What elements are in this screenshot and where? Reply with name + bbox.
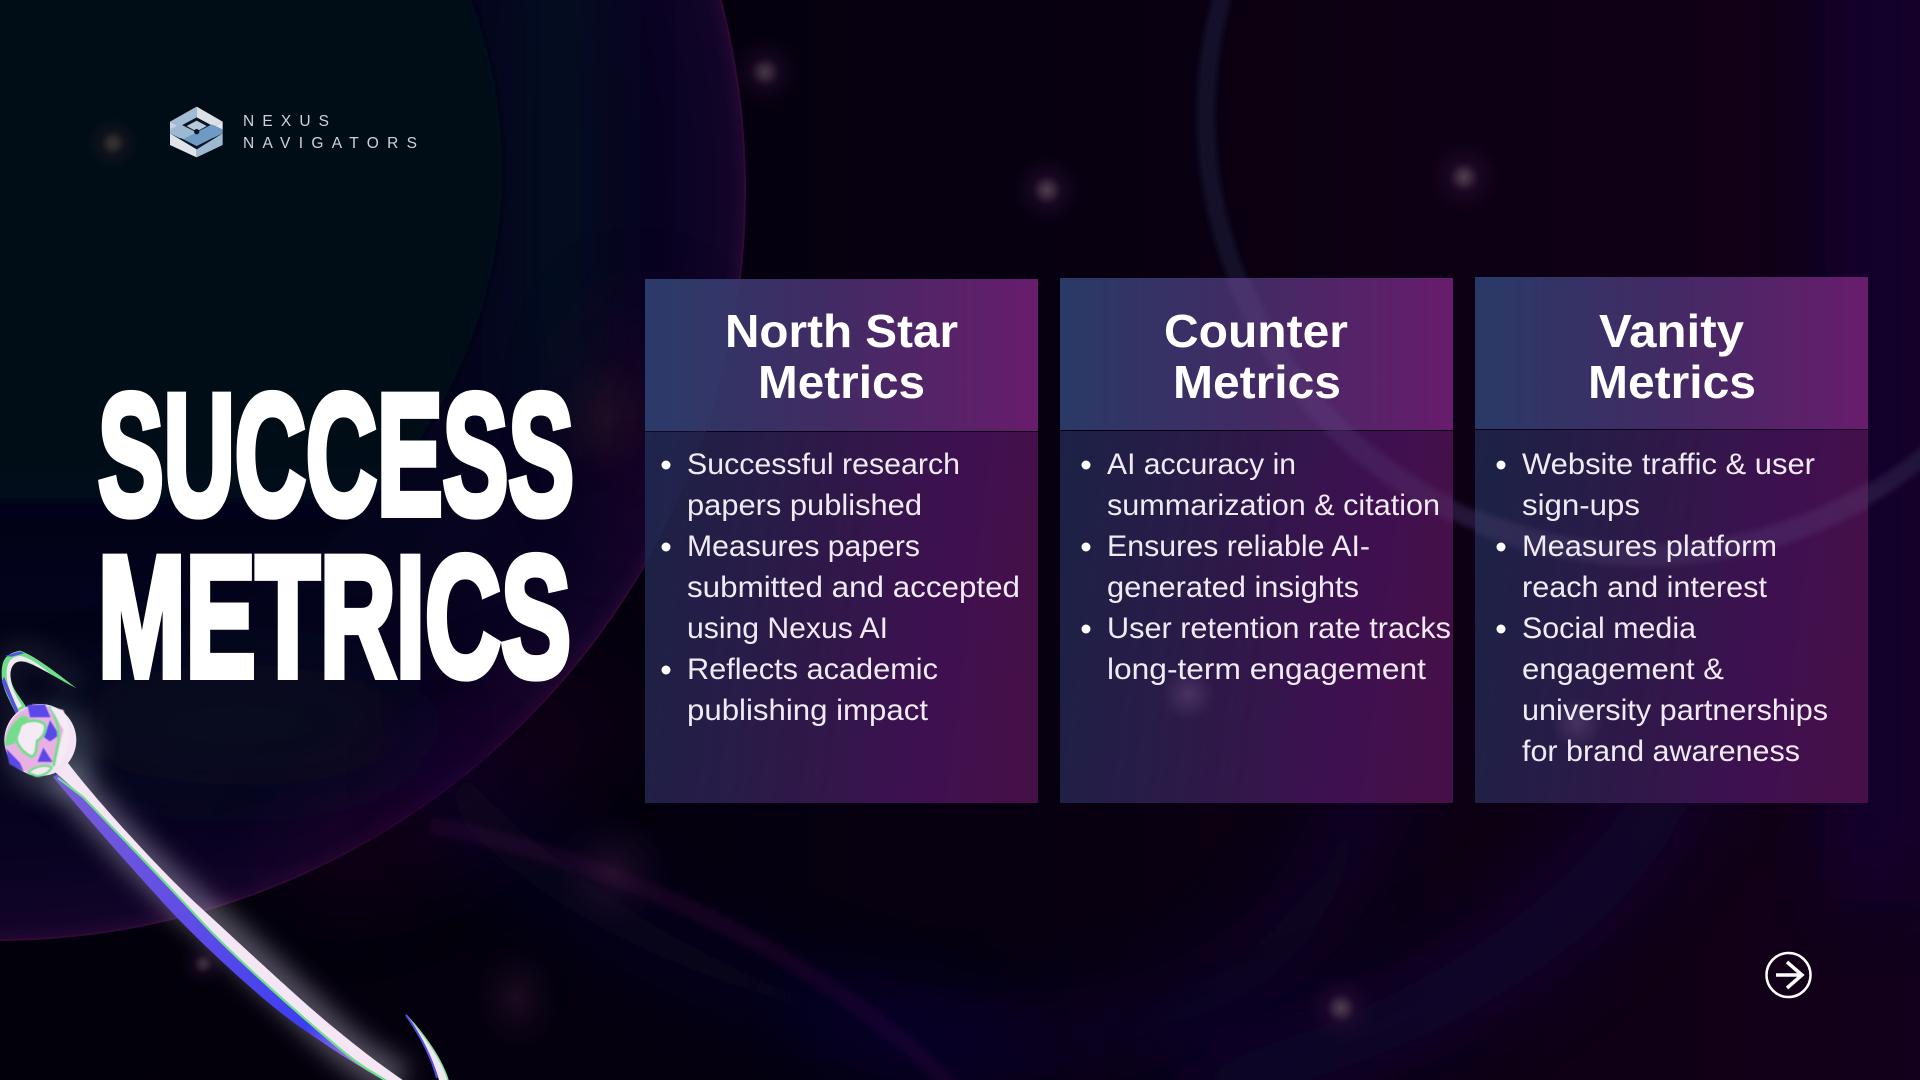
bullet list: Reflects academic	[687, 653, 938, 686]
panel: vanity metrics	[1475, 277, 1868, 803]
logo	[170, 107, 417, 157]
bullet list: Measures platform	[1522, 530, 1777, 563]
bullet list: publishing impact	[687, 694, 929, 727]
staff purple	[53, 770, 395, 1080]
logo text: NEXUS	[243, 113, 329, 130]
heading: Metrics	[1588, 356, 1756, 408]
heading	[1588, 305, 1756, 408]
top hook	[2, 651, 77, 715]
icon: hexagon logo	[170, 107, 223, 157]
panel body	[645, 432, 1038, 803]
bullet list: Measures papers	[687, 530, 920, 563]
inner shell of disc	[0, 0, 502, 652]
ring through panel	[1475, 483, 1868, 565]
bullet list: summarization & citation	[1107, 489, 1440, 522]
heading: North Star	[725, 305, 958, 357]
bullet list: long-term engagement	[1107, 653, 1427, 686]
bullet list: generated insights	[1107, 571, 1359, 604]
bullet list: User retention rate tracks	[1107, 612, 1451, 645]
heading: Counter	[1164, 305, 1348, 357]
glow dots	[87, 117, 139, 169]
bottom right blue arcs	[820, 700, 1400, 1042]
icon: wand with orb	[2, 651, 448, 1080]
logo text	[243, 113, 417, 152]
bullet list	[1496, 448, 1828, 768]
bullet list	[662, 448, 1020, 727]
panel body	[1475, 430, 1868, 803]
title	[98, 359, 574, 713]
panel: counter metrics	[1060, 278, 1453, 803]
bullet list: using Nexus AI	[687, 612, 888, 645]
ring upper right	[1206, 0, 1920, 555]
bullet list: university partnerships	[1522, 694, 1828, 727]
heading: Metrics	[1173, 356, 1341, 408]
bullet list: papers published	[687, 489, 922, 522]
large left disc	[0, 0, 745, 940]
bullet list: reach and interest	[1522, 571, 1768, 604]
bottom hook	[406, 1015, 448, 1080]
heading: Metrics	[758, 356, 925, 408]
heading	[725, 305, 958, 408]
arc lower left	[430, 825, 955, 1080]
panel: north star metrics	[645, 279, 1038, 803]
logo text: NAVIGATORS	[243, 135, 417, 152]
panel header	[1060, 278, 1453, 430]
panel body	[1060, 431, 1453, 803]
ring through panel	[1257, 312, 1453, 521]
bullet list: Ensures reliable AI-	[1107, 530, 1370, 563]
title: SUCCESS	[98, 359, 574, 551]
bullet list: AI accuracy in	[1107, 448, 1296, 481]
bullet list	[1082, 448, 1451, 686]
staff white	[55, 763, 410, 1080]
heading	[1164, 305, 1348, 408]
panel header	[645, 279, 1038, 431]
icon: next arrow	[1766, 953, 1810, 997]
bullet list: Successful research	[687, 448, 960, 481]
panel header	[1475, 277, 1868, 429]
bullet list: engagement &	[1522, 653, 1724, 686]
bullet list: submitted and accepted	[687, 571, 1020, 604]
bullet list: for brand awareness	[1522, 735, 1800, 768]
bullet list: Social media	[1522, 612, 1696, 645]
bullet list: sign-ups	[1522, 489, 1640, 522]
faint glow	[1551, 697, 1603, 749]
staff green	[58, 778, 388, 1080]
title: METRICS	[98, 521, 571, 713]
heading: Vanity	[1599, 305, 1744, 357]
faint glow	[1162, 668, 1214, 720]
disc seen through panel	[0, 0, 745, 940]
bullet list: Website traffic & user	[1522, 448, 1815, 481]
orb	[4, 704, 76, 776]
